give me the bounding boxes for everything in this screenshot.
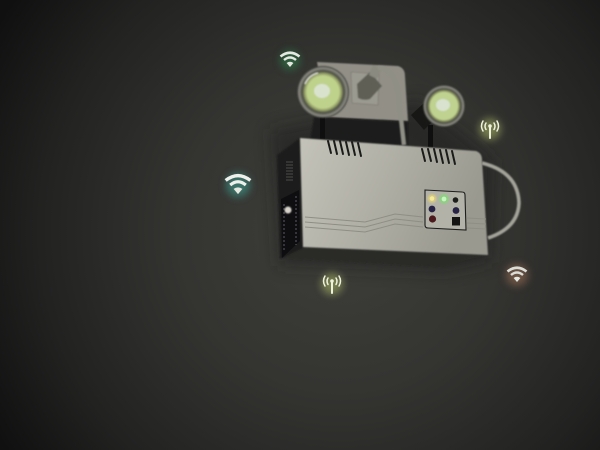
left lamp: [297, 66, 349, 118]
top left vent: [328, 141, 361, 156]
icon: wifi right: [506, 264, 528, 286]
dark backing between plate and unit: [310, 117, 408, 146]
unit front: [300, 138, 488, 255]
icon: wifi left: [226, 173, 250, 197]
side vent: [286, 162, 293, 180]
power cable: [378, 68, 404, 145]
status led: green: [439, 194, 449, 204]
blue button left: [429, 206, 435, 212]
top right vent: [422, 149, 455, 164]
right lamp: [423, 85, 465, 127]
icon: wifi top: [280, 50, 300, 70]
blue button right: [453, 207, 459, 214]
side circuit panel: [281, 190, 300, 258]
black square switch: [452, 217, 460, 226]
lamp stems: [320, 115, 325, 139]
wall plate with plug: [317, 62, 408, 121]
unit left side: [277, 138, 303, 259]
unit shadow: [270, 100, 495, 272]
plug: [357, 72, 382, 100]
right side cable loop: [482, 163, 519, 238]
icon: antenna bottom: [321, 273, 343, 295]
status led: yellow: [428, 194, 436, 203]
status led: off: [453, 197, 458, 203]
unit bottom: [280, 247, 488, 267]
embossed wave lines: [305, 214, 486, 232]
red button: [429, 215, 436, 223]
control panel: [425, 190, 466, 230]
icon: antenna right: [479, 118, 501, 140]
emergency unit body: [277, 138, 488, 267]
